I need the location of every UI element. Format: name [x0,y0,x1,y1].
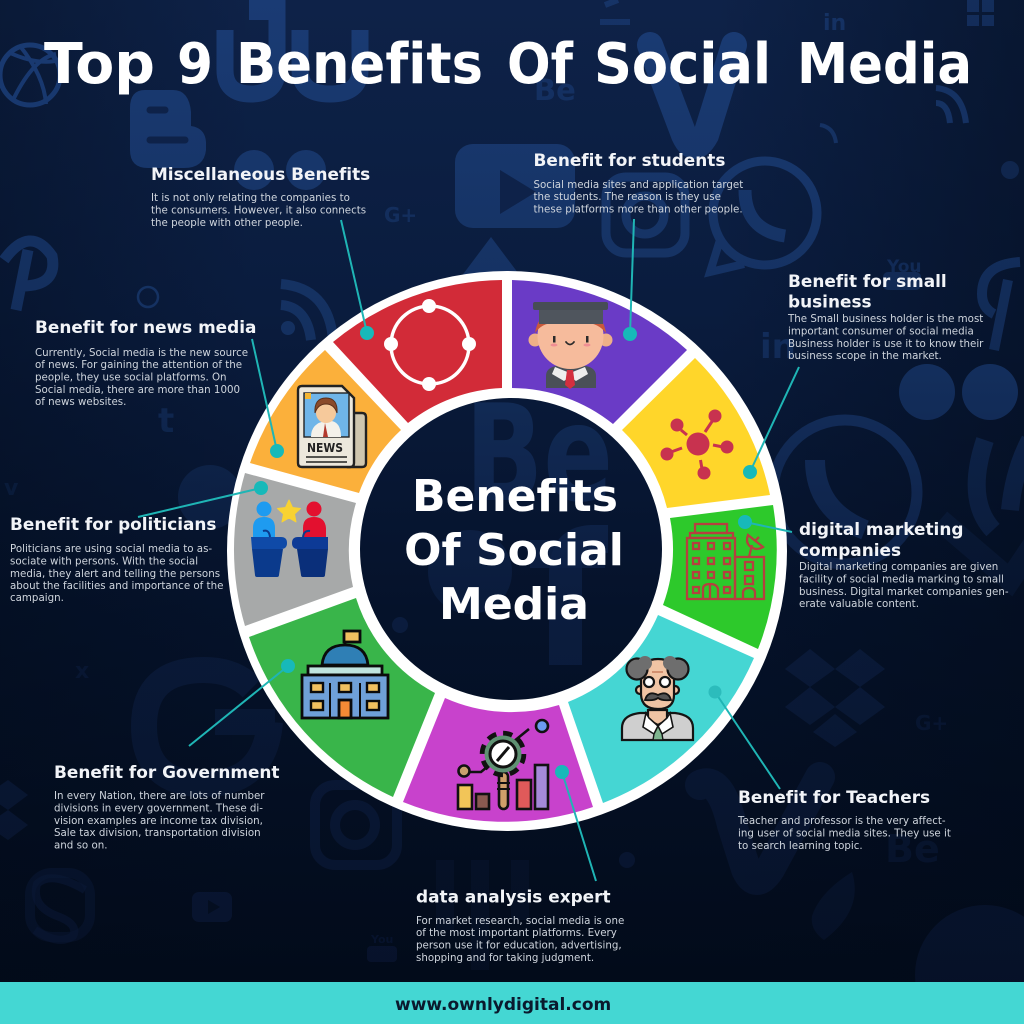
icon: newspaper [298,386,366,467]
title: Of [507,32,574,97]
text: digital marketing companies: business. Digital market companies gen- [799,586,1009,598]
text: miscellaneous benefits: It is not only relating the companies to [151,192,350,204]
text: data analysis expert: person use it for education, advertising, [416,940,622,952]
icon: network hub [660,410,734,480]
text: digital marketing companies [799,519,1009,610]
center heading: Benefits [412,471,618,522]
text: benefit for small business: The Small business holder is the most [787,313,983,325]
text: benefit for government: divisions in every government. These di- [54,802,263,814]
background: t [158,401,174,441]
text: benefit for students: Benefit for students [534,150,725,170]
footer url: www.ownlydigital.com [395,995,611,1015]
title: Social [594,32,771,97]
text: benefit for government: vision examples are income tax division, [54,815,263,827]
background: v [4,476,19,501]
text: miscellaneous benefits: the consumers. However, it also connects [151,204,366,216]
text: benefit for politicians: Politicians are using social media to as- [10,543,212,555]
footer bar [0,982,1024,1024]
text: benefit for students: Social media sites and application target [534,179,743,191]
segment: miscellaneous [333,280,502,423]
text: benefit for government: and so on. [54,840,108,852]
segment: teachers [568,615,754,803]
text: digital marketing companies: facility of social media marking to small [799,574,1004,586]
text: data analysis expert: of the most important platforms. Every [416,927,617,939]
title: Media [797,32,972,97]
text: benefit for teachers: ing user of social media sites. They use it [738,828,951,840]
wheel [227,271,787,831]
text: benefit for politicians: media, they alert and telling the persons [10,568,220,580]
background: Be [465,376,613,532]
icon: professor [622,656,693,740]
text: benefit for students: the students. The reason is they use [534,191,721,203]
center heading: Of Social [404,525,624,576]
icon: two speakers at podiums with star [251,500,328,577]
title: 9 [177,32,213,97]
text: benefit for students: these platforms more than other people. [534,204,743,216]
text: benefit for small business: business scope in the market. [788,350,942,362]
text: digital marketing companies: companies [799,540,901,560]
text: benefit for small business: business [788,292,872,312]
text: benefit for news media: Social media, there are more than 1000 [35,384,240,396]
text: benefit for news media: of news. For gaining the attention of the [35,359,242,371]
title: Benefits [236,32,483,97]
text: benefit for small business: Business holder is use it to know their [788,338,984,350]
text: benefit for news media: of news websites. [35,396,126,408]
icon: ring with four nodes [384,299,476,391]
text: data analysis expert: data analysis expert [416,886,611,906]
text: benefit for students [534,150,743,216]
icon: government building [302,631,388,718]
icon: newspaper: NEWS [307,440,343,455]
background: in [823,11,846,36]
text: benefit for government: Sale tax division, transportation division [54,827,261,839]
background: You [370,933,393,946]
text: benefit for small business [787,271,984,362]
text: miscellaneous benefits: the people with other people. [151,217,303,229]
white ring [227,271,787,831]
text: miscellaneous benefits [151,164,370,229]
text: data analysis expert: shopping and for taking judgment. [416,952,594,964]
title: Top [44,32,155,97]
segment: government [249,598,435,797]
text: benefit for government: Benefit for Government [54,762,280,782]
text: benefit for government [54,762,280,852]
text: benefit for news media: Benefit for news media [35,317,256,337]
text: benefit for small business: Benefit for small [788,271,947,291]
center heading: Media [439,579,589,630]
background: Be [885,827,940,871]
text: miscellaneous benefits: Miscellaneous Benefits [151,164,370,184]
segment: small business [622,358,770,508]
text: benefit for teachers: to search learning topic. [738,840,863,852]
text: data analysis expert: For market research, social media is one [416,915,624,927]
text: benefit for teachers [737,787,951,852]
title [44,32,972,97]
segment: news media [250,350,401,493]
text: benefit for politicians: Benefit for politicians [10,514,216,534]
text: benefit for teachers: Teacher and professor is the very affect- [737,815,946,827]
background: G+ [915,711,948,735]
center heading [404,471,624,630]
background: x [75,659,89,684]
text: benefit for teachers: Benefit for Teachers [738,787,930,807]
text: digital marketing companies: Digital marketing companies are given [799,561,998,573]
leader lines and dots [138,219,799,881]
background: Be [534,73,576,107]
segment: digital marketing [663,505,777,649]
background: in [760,327,796,367]
text: benefit for small business: important consumer of social media [788,326,974,338]
text: benefit for news media [35,317,256,408]
text: benefit for politicians: about the facilities and importance of the [10,580,223,592]
segment: politicians [234,473,356,626]
segment: students [512,280,687,424]
text: benefit for government: In every Nation, there are lots of number [54,790,265,802]
icon: graduate [528,302,612,389]
text: benefit for politicians: sociate with persons. With the social [10,556,198,568]
icon: office building with dish [687,524,764,599]
text: benefit for politicians [10,514,223,604]
text: digital marketing companies: digital marketing [799,519,963,539]
text: benefit for news media: Currently, Social media is the new source [35,347,248,359]
segment: data analysis [403,698,593,822]
text: benefit for politicians: campaign. [10,592,64,604]
icon: data analysis gear and bars [458,720,548,809]
background: G+ [384,203,417,227]
text: benefit for news media: people, they use social platforms. On [35,372,227,384]
background: You [886,257,922,277]
text: data analysis expert [416,886,624,964]
text: digital marketing companies: erate valuable content. [799,598,919,610]
